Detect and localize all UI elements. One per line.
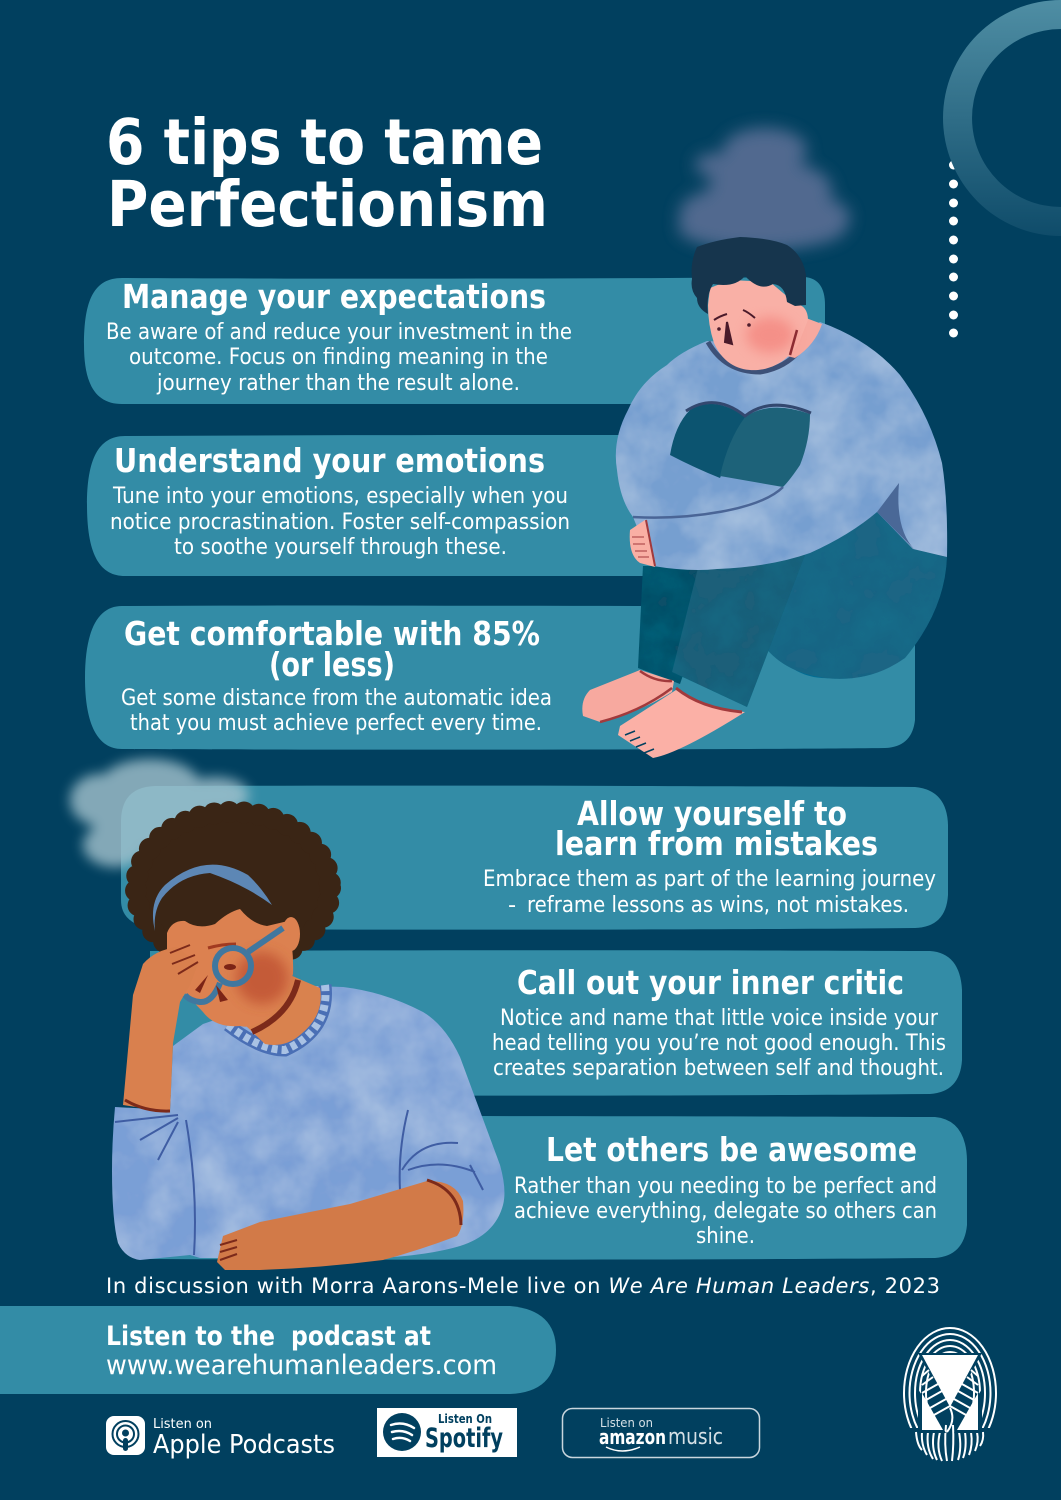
- badge: apple podcasts: Apple Podcasts: [153, 1430, 335, 1460]
- body text: outcome. Focus on finding meaning in the: [129, 344, 548, 370]
- body text: shine.: [696, 1223, 755, 1249]
- body text: [110, 483, 570, 560]
- heading: [555, 794, 878, 863]
- badge: amazon music: Listen on: [600, 1415, 653, 1430]
- heading: [124, 614, 540, 684]
- hand: [630, 520, 655, 567]
- body text: reframe lessons as wins, not mistakes.: [527, 892, 909, 918]
- sweater folds: [115, 1110, 483, 1255]
- body text: Embrace them as part of the learning journey: [483, 866, 936, 892]
- heading: Call out your inner critic: [517, 963, 904, 1002]
- face: [167, 909, 293, 1027]
- heading: Understand your emotions: [114, 441, 545, 480]
- body text: Notice and name that little voice inside your: [500, 1005, 939, 1031]
- body text: Tune into your emotions, especially when you: [112, 483, 568, 509]
- heading: Allow yourself to: [577, 794, 847, 833]
- legs: [638, 512, 947, 707]
- badge: apple podcasts: Listen on: [153, 1417, 212, 1432]
- title: Perfectionism: [107, 168, 548, 241]
- feet: [582, 670, 745, 758]
- heading: Manage your expectations: [122, 277, 546, 316]
- body text: that you must achieve perfect every time.: [130, 710, 542, 736]
- call to action: [106, 1321, 431, 1352]
- body text: [514, 1173, 937, 1249]
- glasses: [185, 928, 283, 1002]
- panel: call out your inner critic: [150, 950, 962, 1096]
- collar: [708, 342, 800, 372]
- source credit: In discussion with Morra Aarons-Mele live on We Are Human Leaders, 2023: [106, 1274, 940, 1298]
- heading: Get comfortable with 85%: [124, 614, 540, 653]
- body text: [483, 866, 936, 918]
- logo: fingerprint: [904, 1328, 996, 1461]
- armpit fold: [877, 483, 915, 550]
- body text: creates separation between self and thought.: [493, 1055, 944, 1081]
- cloud: [678, 128, 850, 250]
- body text: achieve everything, delegate so others can: [514, 1198, 937, 1224]
- body text: Be aware of and reduce your investment in the: [106, 319, 572, 345]
- badge: spotify: Spotify: [425, 1423, 503, 1454]
- illustration: woman with cloud: [70, 759, 504, 1270]
- call to action: podcast at: [291, 1321, 431, 1352]
- decorative dotted line: [949, 160, 958, 338]
- panel: understand your emotions: [87, 435, 700, 576]
- heading: learn from mistakes: [555, 824, 878, 863]
- body text: [121, 685, 552, 736]
- title: 6 tips to tame: [106, 106, 543, 179]
- sweater: [112, 986, 504, 1260]
- website: www.wearehumanleaders.com: [106, 1350, 497, 1381]
- blush: [746, 317, 794, 353]
- facial features: [714, 310, 797, 355]
- body text: -: [508, 892, 516, 918]
- heading: Let others be awesome: [546, 1130, 917, 1169]
- face: [708, 280, 808, 370]
- sweater: [616, 322, 947, 570]
- body text: to soothe yourself through these.: [174, 534, 507, 560]
- badge: amazon music: [562, 1408, 760, 1458]
- decorative arc: [943, 0, 1061, 236]
- skin shadow lines: [125, 945, 461, 1260]
- illustration: man with dark cloud: [582, 128, 947, 758]
- arm raised: [123, 947, 198, 1112]
- badge: amazon music: music: [668, 1425, 723, 1450]
- panel: let others be awesome: [150, 1116, 967, 1260]
- arm resting: [217, 1181, 463, 1270]
- body text: head telling you you’re not good enough. This: [492, 1030, 946, 1056]
- body text: [106, 319, 572, 396]
- eye and nose: [195, 964, 236, 1002]
- panel: manage your expectations: [84, 277, 825, 404]
- collar: [228, 985, 326, 1050]
- hair: [692, 237, 806, 314]
- neck: [245, 975, 321, 1045]
- call to action: Listen to the: [106, 1321, 275, 1352]
- body text: Rather than you needing to be perfect and: [514, 1173, 937, 1199]
- cheek: [236, 952, 288, 1004]
- hair: [136, 812, 330, 964]
- body text: Get some distance from the automatic idea: [121, 685, 552, 711]
- cloud: [70, 759, 249, 867]
- badge: spotify: [377, 1408, 517, 1457]
- neck: [787, 318, 822, 358]
- heading: (or less): [269, 645, 395, 684]
- panel: listen to the podcast: [0, 1306, 556, 1394]
- panel: get comfortable with 85%: [85, 606, 915, 750]
- body text: journey rather than the result alone.: [156, 370, 520, 396]
- body text: [492, 1005, 946, 1081]
- title: [106, 106, 548, 241]
- ear: [282, 917, 300, 951]
- badge: spotify: Listen On: [438, 1412, 492, 1426]
- badge: apple podcasts: [106, 1416, 335, 1460]
- panel: allow yourself to learn from mistakes: [121, 786, 948, 930]
- eyebrow: [208, 944, 236, 948]
- headband: [153, 865, 272, 931]
- badge: amazon music: amazon: [599, 1425, 666, 1449]
- body text: notice procrastination. Foster self-compassion: [110, 509, 570, 535]
- knees: [633, 403, 811, 518]
